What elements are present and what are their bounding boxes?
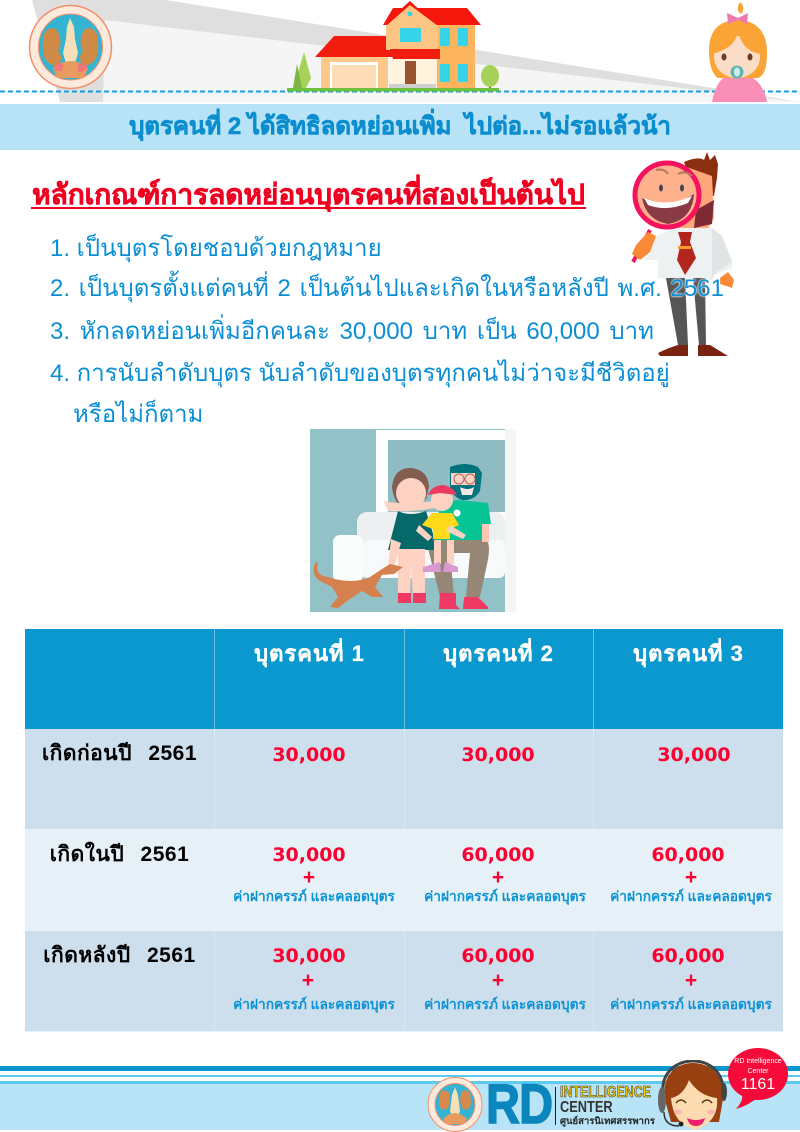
mother <box>392 468 429 509</box>
rule 3: 3. หักลดหย่อนเพิ่มอีกคนละ 30,000 บาท เป็น 60,000 บาท <box>50 318 654 345</box>
callout: hotline 1161: Center <box>747 1068 768 1075</box>
callout: hotline 1161: RD Intelligence <box>734 1058 782 1065</box>
rule 4: 4. การนับลำดับบุตร นับลำดับของบุตรทุกคนไม่ว่าจะมีชีวิตอยู่ <box>50 360 670 387</box>
values in 2561: + <box>492 866 504 889</box>
header: child 1: บุตรคนที่ 1 <box>254 641 365 666</box>
rule 4 <box>50 359 670 428</box>
values after 2561: + <box>685 969 697 992</box>
logo word CENTER: CENTER <box>560 1099 613 1116</box>
title banner <box>0 104 800 150</box>
logo: RD Intelligence Center <box>486 1072 655 1132</box>
row backgrounds <box>25 729 783 1031</box>
values after 2561: 30,000 <box>272 945 346 967</box>
values in 2561: ค่าฝากครรภ์ และคลอดบุตร <box>424 889 586 904</box>
values after 2561 <box>233 945 772 1013</box>
icon: revenue department seal <box>28 4 112 90</box>
values before 2561: 30,000 <box>272 744 346 766</box>
values before 2561: 30,000 <box>461 744 535 766</box>
values in 2561: 60,000 <box>651 844 725 866</box>
header: child 3: บุตรคนที่ 3 <box>633 641 744 666</box>
table header background <box>25 629 783 729</box>
callout: hotline 1161 <box>728 1048 788 1109</box>
logo Thai caption: ศูนย์สารนิเทศสรรพากร <box>560 1116 655 1127</box>
rule 4: หรือไม่ก็ตาม <box>73 401 203 428</box>
values in 2561: ค่าฝากครรภ์ และคลอดบุตร <box>610 889 772 904</box>
values in 2561: 60,000 <box>461 844 535 866</box>
footer band <box>0 1066 800 1130</box>
icon: house <box>287 1 499 92</box>
icon: call centre agent <box>658 1060 727 1130</box>
values after 2561: + <box>302 969 314 992</box>
header illustration background <box>0 0 799 102</box>
values after 2561: ค่าฝากครรภ์ และคลอดบุตร <box>233 997 395 1012</box>
values before 2561: 30,000 <box>657 744 731 766</box>
values after 2561: ค่าฝากครรภ์ และคลอดบุตร <box>610 997 772 1012</box>
illustration: family on sofa <box>310 429 516 612</box>
values after 2561: + <box>492 969 504 992</box>
father <box>426 540 489 597</box>
values in 2561: 30,000 <box>272 844 346 866</box>
values in 2561: ค่าฝากครรภ์ และคลอดบุตร <box>233 889 395 904</box>
header: child 2: บุตรคนที่ 2 <box>443 641 554 666</box>
values after 2561: ค่าฝากครรภ์ และคลอดบุตร <box>424 997 586 1012</box>
values in 2561: + <box>303 866 315 889</box>
table <box>25 629 783 1032</box>
icon: man with magnifying glass <box>631 152 734 356</box>
values before 2561 <box>272 744 731 766</box>
heading: criteria: หลักเกณฑ์การลดหย่อนบุตรคนที่สองเป็นต้นไป <box>32 179 585 210</box>
values in 2561 <box>233 844 772 905</box>
shoes <box>439 593 488 609</box>
row label: before 2561: เกิดก่อนปี 2561 <box>42 742 197 765</box>
row label: after 2561: เกิดหลังปี 2561 <box>43 944 196 967</box>
child <box>431 489 453 511</box>
values after 2561: 60,000 <box>461 945 535 967</box>
values in 2561: + <box>685 866 697 889</box>
title banner: บุตรคนที่ 2 ได้สิทธิลดหย่อนเพิ่ม ไปต่อ...ไม่รอแล้วน้า <box>129 113 671 140</box>
icon: baby with pacifier <box>709 2 767 102</box>
values after 2561: 60,000 <box>651 945 725 967</box>
dog <box>314 562 403 608</box>
footer seal <box>428 1077 482 1132</box>
logo word INTELLIGENCE: INTELLIGENCE <box>560 1084 651 1101</box>
rule 1: 1. เป็นบุตรโดยชอบด้วยกฎหมาย <box>50 235 382 262</box>
rule 2: 2. เป็นบุตรตั้งแต่คนที่ 2 เป็นต้นไปและเกิดในหรือหลังปี พ.ศ. 2561 <box>50 275 724 302</box>
row label: in 2561: เกิดในปี 2561 <box>50 843 189 866</box>
callout: hotline 1161: 1161 <box>741 1076 775 1093</box>
